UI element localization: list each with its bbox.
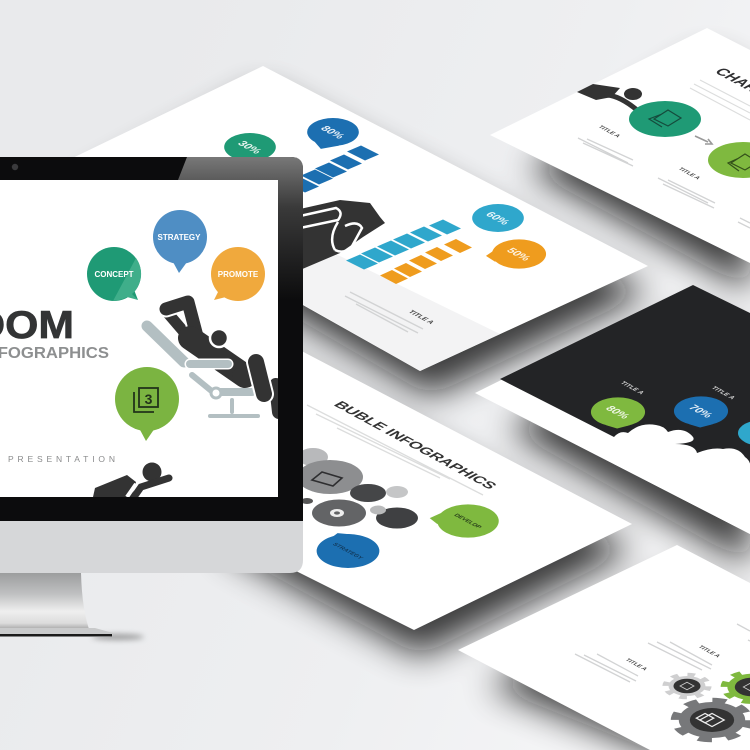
bubble: develop: DEVELOP [452, 513, 482, 530]
bubble: concept: CONCEPT [94, 270, 134, 279]
bubble: 50% [486, 239, 546, 269]
bubble: concept [87, 247, 141, 301]
label: title A: TITLE A [696, 645, 722, 659]
bubble: strategy: STRATEGY [158, 233, 201, 242]
figure: large pictogram [300, 200, 385, 270]
body text lines [738, 218, 750, 228]
camera [12, 164, 18, 170]
heading subtext lines [690, 80, 750, 120]
label: title A: TITLE A [618, 381, 646, 396]
slide: percentage bars [56, 66, 648, 371]
figure: reclining person in chair [147, 302, 279, 416]
person [166, 302, 279, 412]
bubble: 60%: 60% [482, 210, 512, 227]
gear: dark grey [662, 693, 750, 747]
heading: BUBLE INFOGRAPHICS [330, 399, 501, 491]
gear: green [714, 666, 750, 708]
bubble: strategy [316, 533, 380, 568]
presentation label: PRESENTATION [8, 454, 115, 464]
slide: gears [458, 545, 750, 750]
body text lines [737, 624, 750, 641]
number three: 3 [145, 391, 153, 407]
bubble: promote: PROMOTE [218, 270, 259, 279]
body text lines [648, 642, 712, 670]
bubble: promote [211, 247, 265, 301]
subtext lines [307, 405, 483, 495]
circle icon: green [629, 101, 701, 137]
slide: bubble infographics [297, 352, 632, 630]
label: title A: TITLE A [709, 386, 737, 401]
figure: leaning person [577, 84, 642, 110]
bubble: strategy [153, 210, 207, 273]
base edge [0, 634, 112, 636]
bubble: partial [738, 422, 750, 444]
bubble: 50%: 50% [503, 246, 533, 263]
bubble: layers icon [115, 367, 179, 441]
bubble: 60% [472, 204, 524, 232]
bubble: develop [430, 504, 499, 538]
bubble: 30%: 30% [234, 139, 264, 156]
blue bars [303, 146, 379, 192]
cloud [614, 424, 750, 534]
bubble: 80%: 80% [602, 404, 632, 421]
arrow [695, 136, 712, 144]
body text lines [575, 654, 638, 682]
bubble: 80% [307, 118, 359, 149]
body text lines [345, 292, 423, 333]
light band along the lower edge [303, 254, 500, 371]
dark panel [500, 285, 750, 464]
stand [0, 573, 90, 632]
figure: person at bottom [93, 462, 169, 497]
icon: layers with 3 [134, 388, 158, 412]
bezel reflection [178, 157, 303, 300]
body text lines [658, 178, 715, 208]
gear: light [657, 670, 717, 702]
screen content [0, 210, 279, 497]
bezel [0, 157, 303, 521]
bubble: 70%: 70% [685, 403, 715, 420]
label: title A: TITLE A [676, 167, 702, 181]
bubble: 80%: 80% [317, 124, 347, 141]
orange bars [380, 239, 472, 284]
monitor [0, 157, 303, 640]
chin [0, 520, 303, 573]
bubble: 80% [590, 397, 646, 428]
chair [147, 326, 258, 416]
slide: chart [490, 28, 750, 263]
bubble: 30% [224, 133, 276, 157]
label: title A: TITLE A [406, 310, 435, 325]
bubbles [297, 448, 418, 528]
bubble: 70% [674, 396, 728, 428]
foot shadow [92, 634, 144, 640]
label: title A: TITLE A [623, 658, 649, 672]
body text lines [578, 138, 633, 166]
bubble: strategy: STRATEGY [331, 542, 364, 560]
cyan bars [346, 220, 461, 270]
slide: dark cloud [475, 285, 750, 534]
base [0, 628, 113, 637]
screen [0, 180, 278, 497]
label: title A: TITLE A [596, 125, 622, 139]
circle icon: lime [708, 142, 750, 178]
